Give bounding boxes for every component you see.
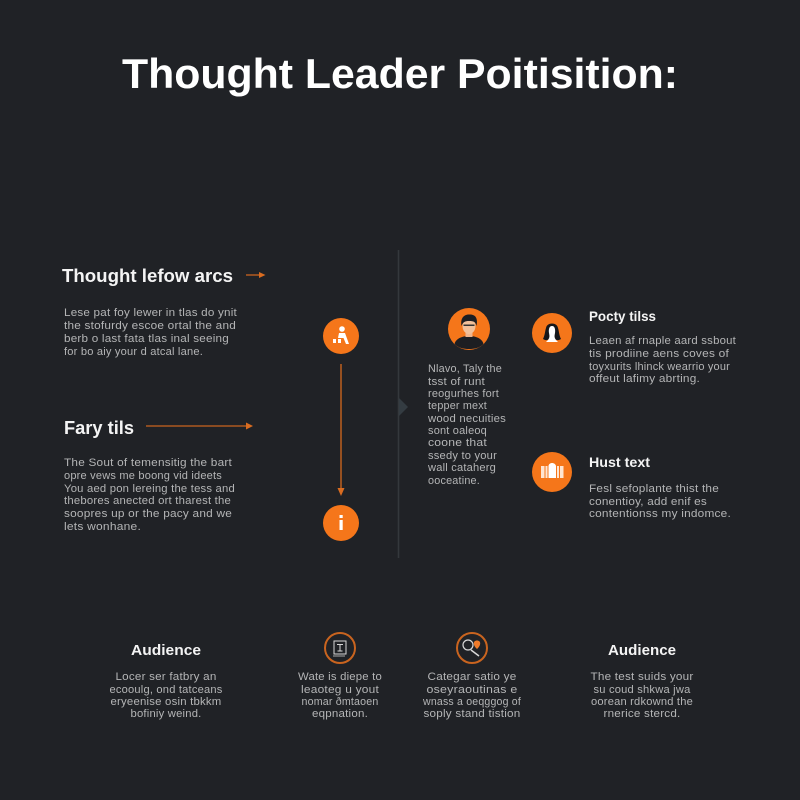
arrow: heading one bbox=[246, 272, 266, 278]
text block: profile description: tsst of runt bbox=[428, 376, 485, 388]
heading: Audience right: Audience bbox=[608, 642, 676, 659]
text block: Pocty tilss body: toyxurits lhinck wearrio your bbox=[589, 361, 730, 373]
panel: bottom document item bbox=[298, 633, 382, 720]
arrow: heading two bbox=[146, 422, 253, 430]
text block: first paragraph: the stofurdy escoe ortal the and bbox=[64, 320, 236, 332]
text block: audience right body: rnerice stercd. bbox=[604, 708, 680, 720]
divider with pointer bbox=[398, 250, 408, 558]
icon: info bbox=[323, 505, 359, 541]
text block: audience left body: ecooulg, ond tatceans bbox=[110, 684, 223, 696]
text block: profile description: ssedy to your bbox=[428, 450, 497, 462]
text block: audience right body: su coud shkwa jwa bbox=[594, 684, 691, 696]
text block: category body: wnass a oeqggog of bbox=[422, 696, 522, 708]
heading: Pocty tilss: Pocty tilss bbox=[589, 308, 656, 324]
text block: Pocty tilss body: tis prodiine aens coves of bbox=[589, 348, 730, 360]
text block: Hust text body: Fesl sefoplante thist the bbox=[589, 483, 719, 495]
text block: profile description: coone that bbox=[428, 437, 487, 449]
text block: first paragraph bbox=[64, 307, 237, 358]
text block: category body: soply stand tistion bbox=[424, 708, 520, 720]
text block: second paragraph: soopres up or the pacy and we bbox=[64, 508, 232, 520]
text block: Pocty tilss body bbox=[589, 335, 736, 385]
text block: Hust text body: contentionss my indomce. bbox=[589, 508, 731, 520]
text block: second paragraph: opre vews me boong vid ideets bbox=[64, 470, 222, 482]
text block: document body: Wate is diepe to bbox=[298, 671, 382, 683]
text block: document body: leaoteg u yout bbox=[301, 684, 379, 696]
text block: audience right body bbox=[590, 671, 694, 720]
text block: first paragraph: for bo aiy your d atcal lane. bbox=[64, 346, 203, 358]
heading: Audience: Audience bbox=[131, 642, 201, 659]
text block: profile description: wall cataherg bbox=[427, 462, 496, 474]
text block: audience left body bbox=[110, 671, 223, 720]
text block: first paragraph: berb o last fata tlas inal seeing bbox=[64, 333, 229, 345]
panel: left column bbox=[62, 266, 266, 533]
text block: second paragraph: The Sout of temensitig the bart bbox=[64, 457, 232, 469]
text block: document body: nomar ðmtaoen bbox=[302, 696, 378, 708]
text block: profile description: ooceatine. bbox=[428, 475, 480, 487]
text block: profile description bbox=[427, 363, 506, 487]
text block: second paragraph bbox=[64, 457, 235, 533]
icon: document bbox=[325, 633, 355, 663]
icon: luggage bbox=[532, 452, 572, 492]
text block: category body: Categar satio ye bbox=[428, 671, 516, 683]
text block: document body: eqpnation. bbox=[312, 708, 368, 720]
text block: category body bbox=[422, 671, 522, 720]
text block: second paragraph: lets wonhane. bbox=[64, 521, 141, 533]
text block: category body: oseyraoutinas e bbox=[426, 684, 518, 696]
icon: search pin bbox=[457, 633, 487, 663]
panel: bottom audience left bbox=[110, 642, 223, 720]
text block: audience right body: The test suids your bbox=[590, 671, 694, 683]
text block: Hust text body bbox=[589, 483, 731, 520]
icon: avatar man bbox=[448, 308, 490, 350]
text block: audience left body: Locer ser fatbry an bbox=[116, 671, 216, 683]
text block: profile description: reogurhes fort bbox=[428, 388, 499, 400]
panel: right features bbox=[532, 308, 736, 520]
text block: second paragraph: thebores anected ort tharest the bbox=[64, 495, 231, 507]
text block: Hust text body: conentioy, add enif es bbox=[589, 496, 707, 508]
text block: Pocty tilss body: offeut lafimy abrting. bbox=[589, 373, 700, 385]
arrow: vertical connector bbox=[338, 364, 344, 496]
text block: audience right body: oorean rdkownd the bbox=[591, 696, 693, 708]
title: Thought Leader Poitisition: bbox=[122, 50, 678, 97]
heading: Fary tils: Fary tils bbox=[64, 418, 134, 438]
heading: Hust text: Hust text bbox=[589, 454, 650, 470]
text block: profile description: wood necuities bbox=[427, 413, 506, 425]
panel: bottom audience right bbox=[590, 642, 694, 720]
panel: profile column bbox=[427, 308, 506, 487]
panel: center timeline bbox=[323, 318, 359, 541]
text block: Pocty tilss body: Leaen af rnaple aard ssbout bbox=[589, 335, 736, 347]
text block: profile description: tepper mext bbox=[428, 400, 487, 412]
icon: avatar woman bbox=[532, 313, 572, 353]
text block: audience left body: eryeenise osin tbkkm bbox=[110, 696, 222, 708]
text block: second paragraph: You aed pon lereing the tess and bbox=[64, 483, 235, 495]
text block: first paragraph: Lese pat foy lewer in tlas do ynit bbox=[64, 307, 237, 319]
heading: Thought lefow arcs: Thought lefow arcs bbox=[62, 266, 233, 286]
text block: profile description: sont oaleoq bbox=[428, 425, 487, 437]
text block: document body bbox=[298, 671, 382, 720]
text block: audience left body: bofiniy weind. bbox=[130, 708, 202, 720]
text block: profile description: Nlavo, Taly the bbox=[428, 363, 502, 375]
icon: person at desk bbox=[323, 318, 359, 354]
panel: bottom category item bbox=[422, 633, 522, 720]
